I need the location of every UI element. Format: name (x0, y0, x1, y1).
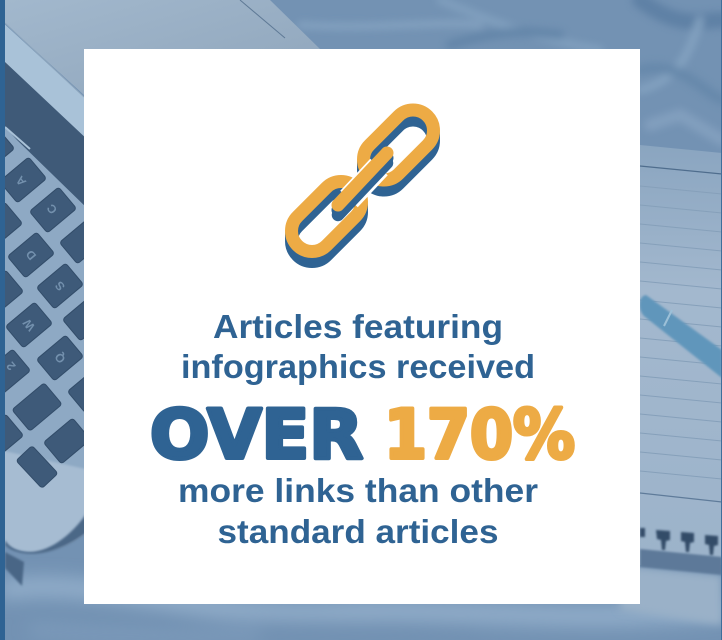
laptop deck (0, 60, 90, 552)
laptop lid (0, 0, 320, 95)
key letters: S (52, 278, 68, 294)
headline text: Articles featuring (213, 308, 503, 345)
notebook (620, 145, 722, 625)
key letters: W (20, 316, 38, 334)
key letters: 2 (3, 359, 19, 373)
laptop shadow (5, 508, 90, 554)
fabric below the laptop (0, 587, 722, 636)
white content panel (84, 49, 640, 604)
key letters (3, 173, 68, 373)
headline text: infographics received (181, 348, 535, 385)
closing text: standard articles (218, 513, 498, 550)
closing text (178, 472, 538, 550)
pen (640, 295, 722, 378)
closing text: more links than other (178, 472, 538, 509)
key statistic: over 170%: 170% (384, 396, 575, 475)
key letters: Q (52, 350, 68, 366)
key letters: C (44, 201, 60, 217)
key statistic: over 170%: OVER (150, 396, 363, 475)
key letters: D (23, 247, 39, 263)
icon: chain link (292, 110, 433, 261)
headline text (181, 308, 535, 385)
keyboard keys (0, 127, 115, 488)
key statistic: over 170% (150, 396, 575, 475)
key letters: A (13, 173, 29, 189)
